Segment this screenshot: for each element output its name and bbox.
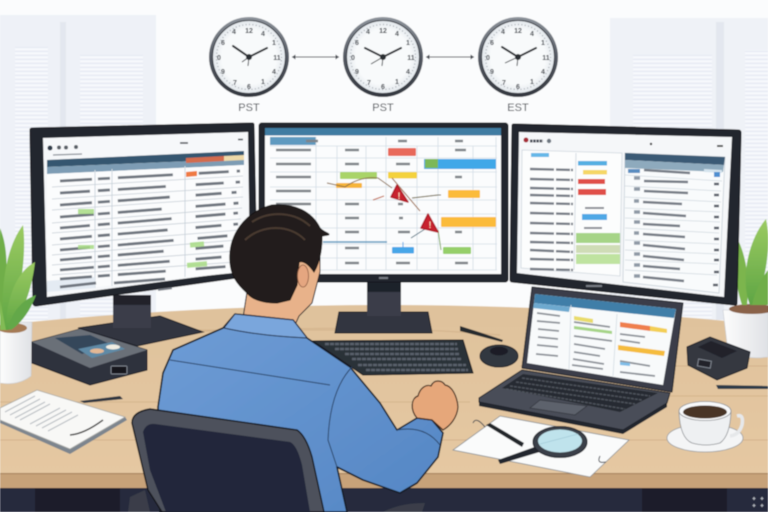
clocks row: [209, 17, 558, 114]
clock labels: PST: [372, 102, 394, 114]
shirt folds: [170, 360, 440, 467]
arrow: PST to PST: [292, 54, 339, 60]
desk: [0, 305, 768, 512]
app logo: [524, 138, 723, 146]
shirt: [158, 314, 443, 512]
hardware box: left desk: [32, 329, 147, 385]
alert triangles: [391, 185, 438, 232]
clipboard paper: [453, 416, 629, 477]
plant: left: [0, 225, 36, 384]
clock: PST center: [343, 17, 423, 97]
laptop base: [479, 370, 670, 430]
chips: [531, 153, 620, 264]
coffee cup and saucer: [667, 402, 743, 452]
app header: [265, 128, 501, 136]
notebook: [0, 390, 127, 454]
wireless puck: [480, 345, 518, 367]
trackpad: [530, 400, 587, 415]
laptop: [479, 287, 683, 434]
pen: center desk: [460, 326, 503, 342]
laptop lid: [522, 287, 683, 392]
schedule blocks: [336, 148, 496, 254]
clock labels: EST: [507, 102, 529, 114]
neck and face: [243, 250, 320, 325]
clock labels: PST: [238, 102, 260, 114]
laptop keyboard: [502, 374, 658, 412]
grid lines: [270, 137, 497, 270]
magnifying glass: [498, 426, 587, 464]
hair: [230, 205, 329, 303]
shirt collar: [224, 314, 307, 338]
keyboard: [313, 340, 473, 375]
conflict connectors: [323, 178, 441, 250]
monitor stand: left: [78, 295, 203, 346]
task label text rows: [276, 141, 468, 263]
pen: right: [716, 385, 768, 389]
alert triangles: !: [398, 191, 400, 201]
arrow: PST to EST: [426, 54, 474, 60]
status highlights: [78, 209, 207, 268]
toolbar dots: [48, 140, 243, 155]
device: right desk: [687, 337, 750, 380]
alert triangles: !: [428, 220, 432, 230]
right task panel: [623, 153, 725, 293]
table body: [47, 165, 244, 292]
monitor: left, log table: [30, 123, 257, 306]
hair highlights: [245, 214, 310, 240]
pen: left: [80, 396, 123, 403]
person at desk seen from behind: [158, 205, 458, 512]
pen on paper: [486, 423, 524, 447]
plant: right: [723, 219, 768, 358]
clock labels: [238, 102, 529, 114]
laptop screen: [527, 294, 676, 385]
left task panel: [521, 150, 622, 276]
hand: [412, 381, 458, 430]
corner sparkle mark: [752, 497, 764, 507]
clock: PST left: [209, 17, 289, 97]
monitor stand: center: [335, 280, 432, 333]
table header: [47, 151, 244, 174]
monitor: right, task lists: [510, 124, 741, 305]
office chair back: [128, 409, 425, 512]
monitor: center, schedule grid with conflict alerts: [259, 123, 508, 282]
clock: EST right: [478, 17, 558, 97]
ear: [298, 265, 308, 287]
